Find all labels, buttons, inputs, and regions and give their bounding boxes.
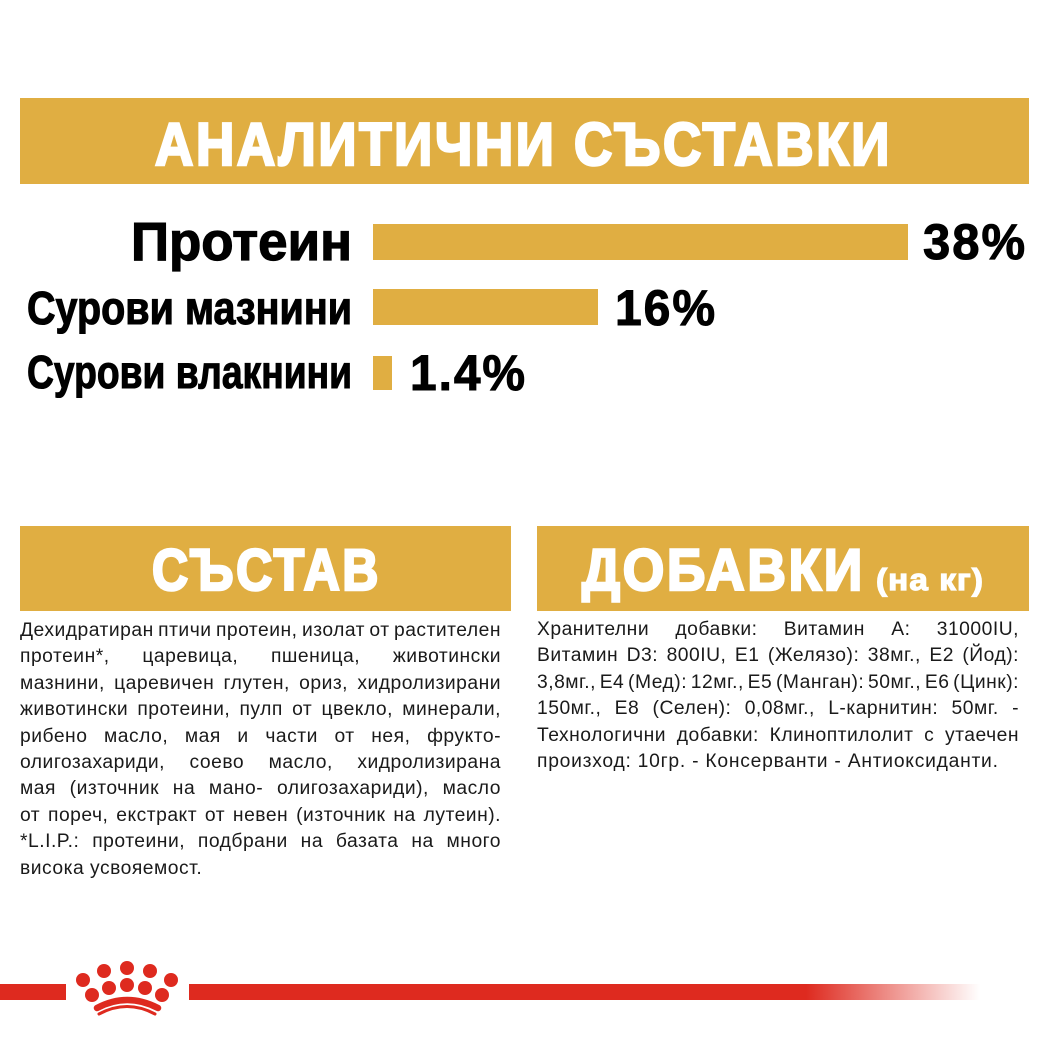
text block: additives: 150мг., Е8 (Селен): 0,08мг., L-карнитин: 50мг. - — [537, 698, 1019, 719]
additives heading: (на кг) — [876, 562, 984, 597]
text block: composition: протеин*, царевица, пшеница, животински — [20, 646, 501, 667]
crude fibre row: Сурови влакнини — [27, 346, 352, 398]
icon: royal crown logo — [76, 961, 178, 1014]
crude fibre row: 1.4% — [410, 345, 527, 401]
text block: additives: Технологични добавки: Клиноптилолит с утаечен — [537, 725, 1019, 746]
crude fat row: 16% — [615, 280, 717, 336]
text block: composition: мазнини, царевичен глутен, ориз, хидролизирани — [20, 673, 501, 694]
crude fat row — [27, 280, 717, 336]
composition heading — [20, 526, 511, 611]
bar chart: analytical constituents — [27, 212, 1027, 401]
text block: composition: Дехидратиран птичи протеин, изолат от растителен — [20, 620, 501, 641]
text block: composition: мая (източник на мано- олигозахариди), масло — [20, 778, 501, 799]
additives heading — [537, 526, 1029, 611]
text block: additives: Витамин D3: 800IU, Е1 (Желязо): 38мг., Е2 (Йод): — [537, 645, 1019, 666]
additives heading: ДОБАВКИ — [582, 538, 865, 603]
text block: composition: от пореч, екстракт от невен (източник на лутеин). — [20, 805, 501, 826]
text block: additives — [537, 619, 1019, 772]
text block: additives: произход: 10гр. - Консерванти - Антиоксиданти. — [537, 751, 999, 772]
title banner — [20, 98, 1029, 184]
text block: composition: висока усвояемост. — [20, 858, 202, 879]
protein row: 38% — [923, 214, 1027, 270]
text block: composition — [20, 620, 501, 879]
text block: composition: олигозахариди, соево масло, хидролизирана — [20, 752, 501, 773]
text block: composition: животински протеини, пулп от цвекло, минерали, — [20, 699, 501, 720]
text block: composition: рибено масло, мая и части от нея, фрукто- — [20, 726, 501, 747]
text block: additives: Хранителни добавки: Витамин А: 31000IU, — [537, 619, 1019, 640]
text block: additives: 3,8мг., Е4 (Мед): 12мг., Е5 (Манган): 50мг., Е6 (Цинк): — [537, 672, 1019, 693]
text block: composition: *L.I.P.: протеини, подбрани на базата на много — [20, 831, 501, 852]
footer red line left — [0, 984, 66, 1000]
protein row: Протеин — [131, 212, 352, 272]
footer red line right — [189, 984, 980, 1000]
title banner: АНАЛИТИЧНИ СЪСТАВКИ — [155, 111, 892, 178]
composition heading: СЪСТАВ — [152, 538, 381, 603]
protein row — [131, 212, 1027, 272]
crude fat row: Сурови мазнини — [27, 282, 352, 334]
